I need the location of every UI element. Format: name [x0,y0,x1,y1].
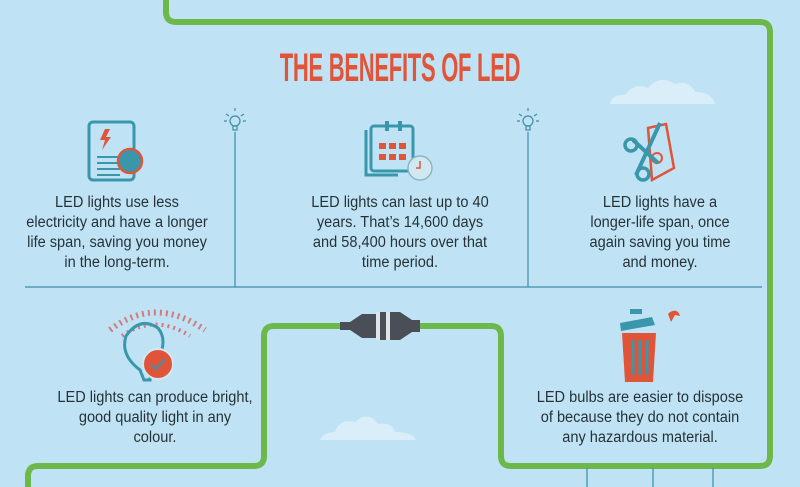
text: 40 years: time period. [362,254,438,271]
text: life span [590,194,730,271]
icon: plug [340,312,420,340]
text: dispose [537,389,743,446]
text: life span: longer-life span, once [590,214,730,231]
clouds [320,80,715,440]
text: electricity: LED lights use less [55,194,179,211]
icon: bill [89,122,142,180]
text: electricity: life span, saving you money [27,234,207,251]
text: electricity [26,194,208,271]
icon: trash bin [620,309,680,382]
icon: calendar [366,121,432,180]
text: life span: LED lights have a [603,194,717,211]
text: 40 years [311,194,489,271]
text: bright light: LED lights can produce bright, [57,389,253,406]
icon: small bulbs [224,108,539,130]
text: bright light: colour. [134,429,176,446]
text: dispose: LED bulbs are easier to dispose [537,389,743,406]
text: 40 years: years. That’s 14,600 days [317,214,483,231]
text: 40 years: LED lights can last up to 40 [311,194,489,211]
thin divider lines [25,132,762,487]
text: electricity: electricity and have a longer [26,214,208,231]
text: dispose: of because they do not contain [541,409,739,426]
icon: scissors and coupon [625,123,674,180]
text: electricity: in the long-term. [64,254,170,271]
icon: bulb with check [110,312,205,380]
text: bright light [57,389,253,446]
title: THE BENEFITS OF LED [280,46,520,90]
text: dispose: any hazardous material. [562,429,718,446]
text: life span: and money. [622,254,698,271]
text: life span: again saving you time [590,234,730,251]
text: 40 years: and 58,400 hours over that [313,234,487,251]
text: bright light: good quality light in any [79,409,231,426]
